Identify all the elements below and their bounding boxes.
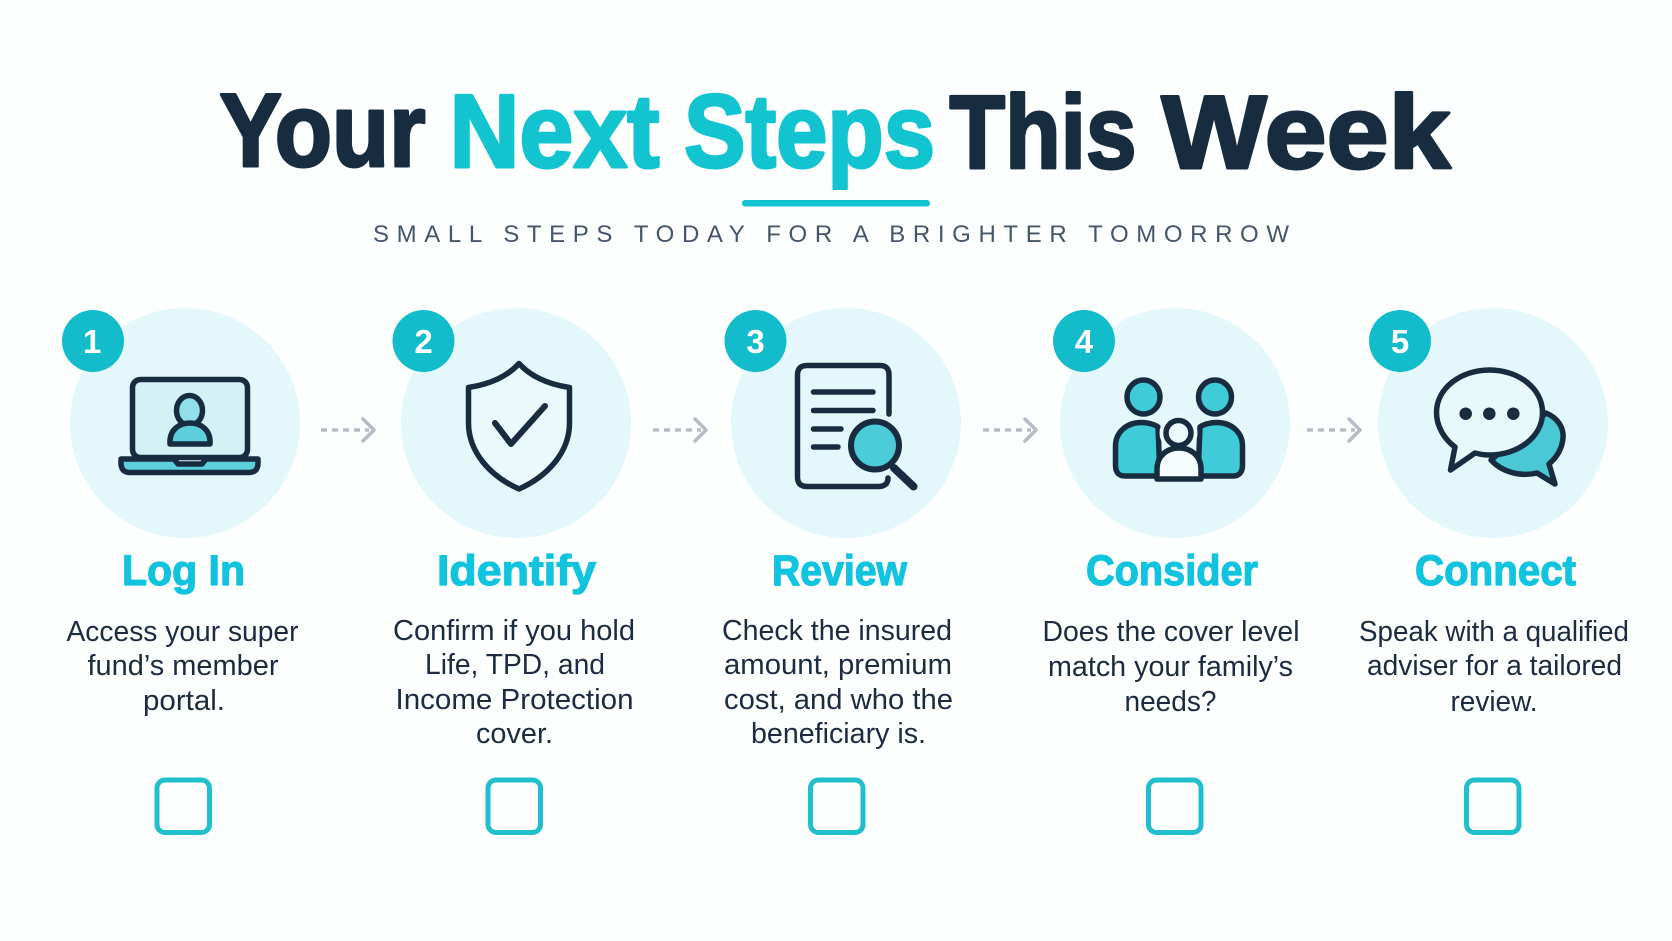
step 4 number badge: 4 bbox=[1075, 323, 1094, 360]
step 3 circle bbox=[731, 308, 961, 538]
icon: laptop with user bbox=[121, 380, 258, 472]
step 3 heading: Review bbox=[772, 547, 907, 595]
step 1 checkbox bbox=[157, 780, 210, 832]
step 3 number badge: 3 bbox=[746, 323, 765, 360]
step 3 checkbox bbox=[810, 780, 863, 832]
step 1 description: Access your super bbox=[66, 616, 299, 648]
step 4 description bbox=[1042, 616, 1300, 718]
title underline bbox=[742, 200, 930, 206]
step 2 circle bbox=[401, 308, 631, 538]
step 4 circle bbox=[1060, 308, 1290, 538]
step 3 description: amount, premium bbox=[724, 649, 952, 681]
step 1 description: fund’s member bbox=[88, 650, 279, 682]
title: Your bbox=[220, 73, 426, 189]
step 4 description: needs? bbox=[1124, 686, 1216, 718]
step 4 number badge bbox=[1053, 310, 1115, 372]
step 4: consider bbox=[1042, 308, 1300, 832]
step 1 number badge: 1 bbox=[83, 323, 101, 360]
step 1 heading: Log In bbox=[122, 547, 245, 595]
icon: family group bbox=[1116, 380, 1242, 479]
step 3 description: Check the insured bbox=[722, 615, 952, 647]
step 5 description: adviser for a tailored bbox=[1367, 650, 1622, 682]
arrow 1 to 2 bbox=[321, 419, 374, 441]
step 5 description: review. bbox=[1450, 686, 1538, 718]
icon: shield with check bbox=[468, 364, 570, 489]
subtitle: SMALL STEPS TODAY FOR A BRIGHTER TOMORROW bbox=[373, 221, 1289, 248]
step 5 number badge: 5 bbox=[1391, 323, 1409, 360]
icon: chat bubbles bbox=[1436, 370, 1563, 484]
step 2: identify bbox=[392, 308, 635, 832]
step 5 circle bbox=[1378, 308, 1608, 538]
step 2 number badge: 2 bbox=[414, 323, 433, 360]
step 3: review bbox=[722, 308, 961, 832]
title: Next bbox=[450, 74, 660, 190]
step 2 description: Life, TPD, and bbox=[425, 649, 605, 681]
step 5: connect bbox=[1359, 308, 1629, 832]
step 5 checkbox bbox=[1466, 780, 1519, 832]
step 3 description: cost, and who the bbox=[724, 684, 953, 716]
step 2 checkbox bbox=[488, 780, 540, 832]
title bbox=[220, 73, 1451, 191]
title: Steps bbox=[684, 74, 935, 190]
step 2 description: Confirm if you hold bbox=[393, 615, 635, 647]
step 1 description bbox=[66, 616, 299, 717]
step 4 checkbox bbox=[1148, 780, 1201, 832]
step 1: log in bbox=[62, 308, 300, 832]
arrow 4 to 5 bbox=[1307, 419, 1360, 441]
step 2 heading: Identify bbox=[437, 547, 596, 595]
step 3 description: beneficiary is. bbox=[751, 718, 926, 750]
icon: document with magnifier bbox=[798, 366, 914, 486]
step 1 number badge bbox=[62, 310, 124, 372]
arrow 2 to 3 bbox=[653, 419, 706, 441]
step 5 description: Speak with a qualified bbox=[1359, 616, 1629, 648]
step 1 circle bbox=[70, 308, 300, 538]
step 4 description: Does the cover level bbox=[1042, 616, 1300, 648]
title: This bbox=[950, 75, 1136, 191]
step 2 description: cover. bbox=[476, 718, 553, 750]
step 1 description: portal. bbox=[143, 685, 225, 717]
step 2 number badge bbox=[392, 310, 454, 372]
step 5 description bbox=[1359, 616, 1629, 718]
title: Week bbox=[1162, 75, 1451, 191]
step 3 number badge bbox=[724, 310, 786, 372]
step 5 heading: Connect bbox=[1415, 547, 1576, 595]
step 2 description bbox=[393, 615, 635, 750]
step 3 description bbox=[722, 615, 953, 750]
step 2 description: Income Protection bbox=[396, 684, 634, 716]
arrow 3 to 4 bbox=[983, 419, 1036, 441]
step 5 number badge bbox=[1369, 310, 1431, 372]
step 4 heading: Consider bbox=[1086, 547, 1258, 595]
step 4 description: match your family’s bbox=[1048, 651, 1293, 683]
